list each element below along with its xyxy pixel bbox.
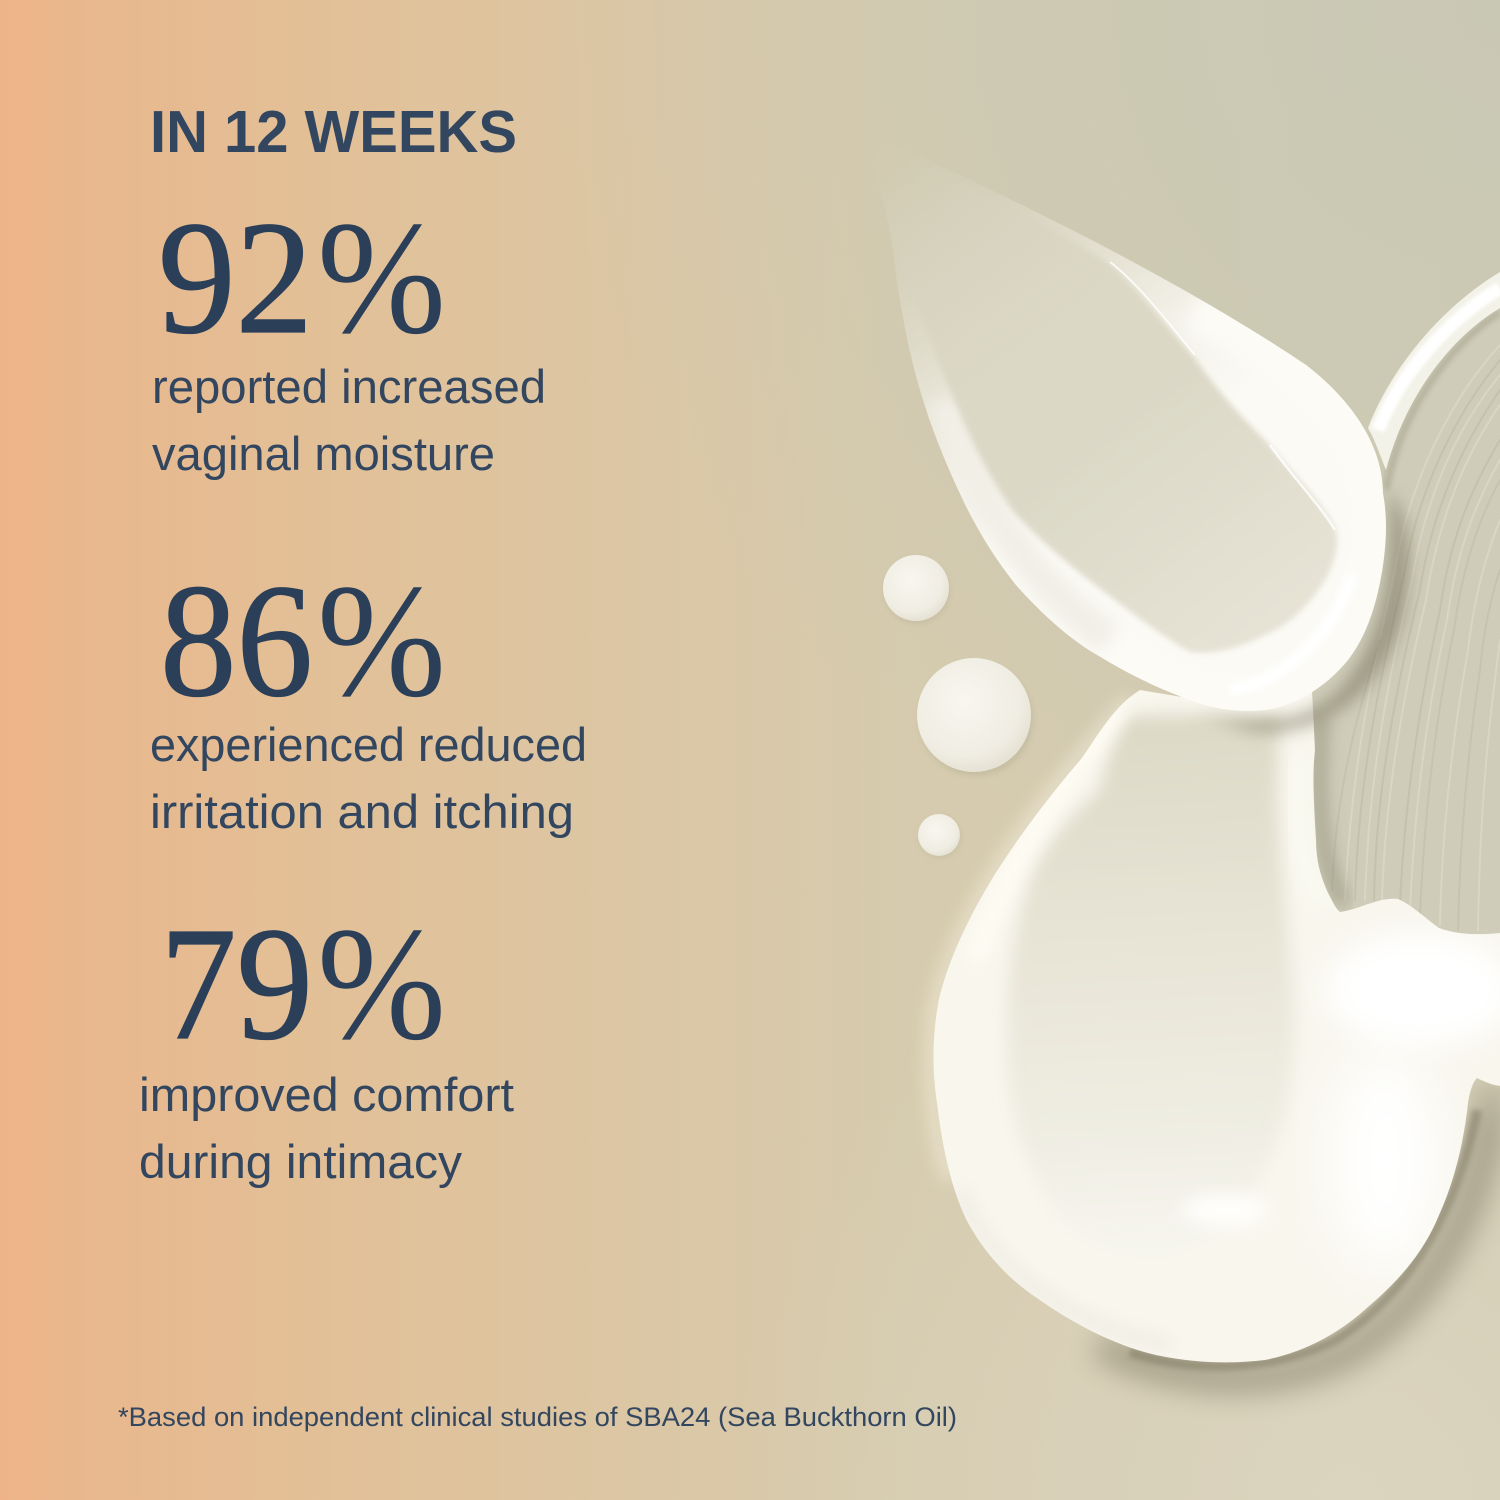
smear surface (1298, 300, 1500, 940)
lower blob shadow (1100, 1099, 1500, 1378)
stat: 92 percent (152, 189, 546, 480)
value: % (317, 189, 446, 368)
value: 92 (158, 189, 313, 368)
description: reported increased (152, 360, 546, 413)
description: irritation and itching (150, 785, 574, 838)
droplet: small bottom (918, 814, 961, 858)
upper leaf shadow (1150, 490, 1409, 731)
smear rim shadow (1386, 312, 1500, 490)
value: 79 (160, 895, 313, 1074)
droplet: small top (883, 555, 950, 624)
description: during intimacy (139, 1135, 462, 1188)
smear striations (1332, 345, 1500, 930)
lower blob bright right lobe (1325, 932, 1500, 1048)
lower blob glow (932, 700, 1130, 1180)
upper leaf white rim (1072, 299, 1386, 697)
description: experienced reduced (150, 718, 587, 771)
footnote: *Based on independent clinical studies of SBA24 (Sea Buckthorn Oil) (118, 1402, 957, 1432)
cream swatch: upper leaf (892, 184, 1417, 740)
lower blob basin (1006, 709, 1294, 1158)
value: % (317, 895, 446, 1074)
description: vaginal moisture (152, 427, 495, 480)
description: improved comfort (139, 1068, 514, 1121)
stat: 79 percent (139, 895, 514, 1188)
value: % (317, 552, 446, 731)
cream swatch: lower blob (932, 690, 1500, 1378)
value: 86 (160, 552, 313, 731)
smear shadow along blob (1319, 720, 1345, 905)
lower blob body (933, 690, 1500, 1362)
droplet: large middle (917, 658, 1033, 776)
cream swatch: textured smear with rim (1298, 272, 1500, 940)
title: IN 12 WEEKS (150, 99, 517, 165)
upper leaf gloss streak (1110, 262, 1195, 355)
upper leaf inner translucent plane (934, 242, 1339, 654)
upper leaf body (862, 130, 1386, 711)
stat: 86 percent (150, 552, 587, 838)
smear rim (1368, 272, 1500, 470)
